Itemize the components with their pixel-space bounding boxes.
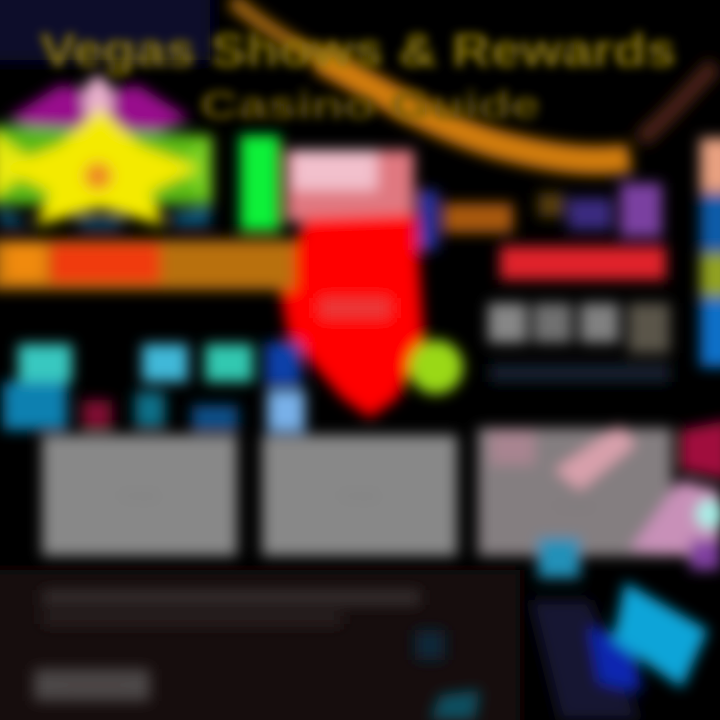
body text xyxy=(42,590,420,625)
panel: right xyxy=(478,428,672,556)
orange band xyxy=(0,240,295,290)
panel: middle: Details xyxy=(340,488,380,503)
panel: middle xyxy=(262,435,457,556)
orange label and small icons xyxy=(443,183,662,237)
title xyxy=(40,24,676,127)
pink heading block xyxy=(286,150,438,250)
title: Casino Guide xyxy=(200,85,540,127)
icon: star emblem xyxy=(0,76,212,228)
title: Vegas Shows & Rewards xyxy=(40,24,676,76)
button: Learn more xyxy=(56,677,128,693)
orange curved streak xyxy=(232,0,715,160)
panel: right: Details xyxy=(555,498,595,513)
green bar xyxy=(240,135,280,231)
bottom right graphic xyxy=(415,538,708,720)
right edge column xyxy=(700,138,720,367)
grey statistics text xyxy=(488,303,670,382)
red shape xyxy=(280,214,424,418)
button xyxy=(34,669,150,701)
lime circle xyxy=(409,340,463,394)
panel: left: Details xyxy=(120,488,160,503)
panel: left xyxy=(42,435,237,556)
decorative pink and magenta shapes xyxy=(490,420,720,570)
red bar xyxy=(500,246,666,280)
cyan icons row xyxy=(3,342,305,432)
